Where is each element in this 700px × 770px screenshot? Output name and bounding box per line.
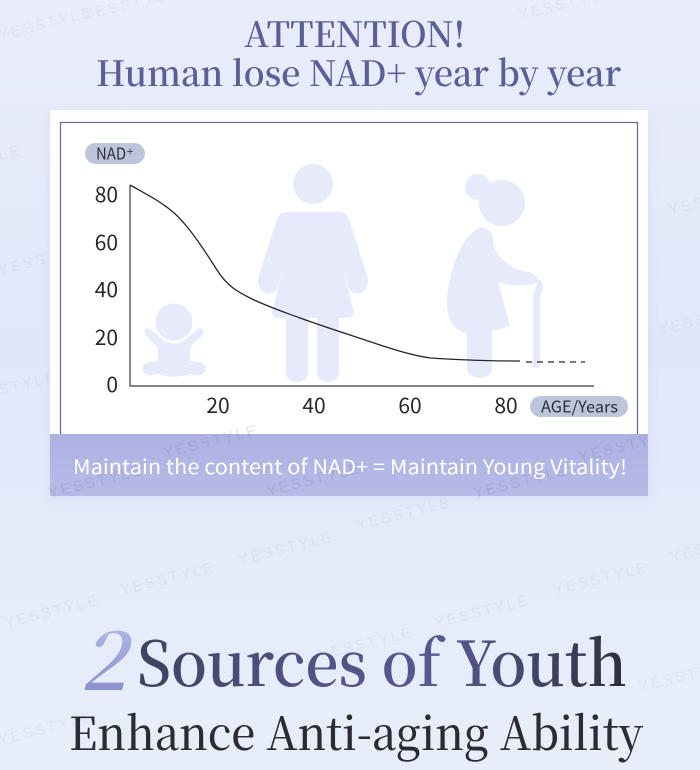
- subheading: Enhance Anti-aging Ability: [69, 698, 643, 764]
- banner: Maintain the content of NAD+ = Maintain Young Vitality!: [73, 451, 627, 480]
- line chart: NAD+ decline by age: [130, 185, 594, 386]
- title: ATTENTION!: [244, 8, 465, 58]
- text: YESSTYLE: [552, 559, 651, 599]
- y axis labels: 80: [95, 179, 118, 209]
- banner: YESSTYLE: [47, 462, 146, 502]
- label: NAD+ pill: [85, 140, 145, 164]
- text: YESSTYLE: [355, 494, 454, 534]
- text: YESSTYLE: [317, 624, 416, 664]
- x axis labels: 80: [494, 390, 518, 420]
- icon: elderly woman with cane: [447, 174, 543, 378]
- icon: baby: [143, 304, 205, 376]
- label: NAD+ pill: NAD⁺: [96, 140, 134, 164]
- banner: [47, 422, 653, 502]
- x axis labels: 60: [398, 390, 422, 420]
- text: YESSTYLE: [119, 559, 218, 599]
- y axis labels: [95, 179, 118, 399]
- text: YESSTYLE: [433, 592, 532, 632]
- text: YESSTYLE: [3, 592, 102, 632]
- y axis labels: 60: [95, 227, 118, 257]
- x axis labels: [206, 390, 518, 420]
- x axis labels: 40: [302, 390, 326, 420]
- heading: 2 Sources of Youth: Sources of Youth: [137, 615, 627, 704]
- label: age pill: AGE/Years: [541, 394, 618, 418]
- y axis labels: 40: [95, 274, 118, 304]
- heading: 2 Sources of Youth: 2: [80, 597, 134, 714]
- banner: YESSTYLE: [162, 422, 261, 462]
- y axis labels: 20: [95, 322, 118, 352]
- banner: YESSTY: [577, 431, 653, 466]
- banner: YESSTYLE: [472, 462, 571, 502]
- banner: YESSTYLE: [265, 460, 364, 500]
- y axis labels: 0: [106, 369, 118, 399]
- text: YESSTYLE: [237, 529, 336, 569]
- icon: adult woman: [258, 164, 368, 382]
- panel: NAD+ chart: [50, 110, 648, 498]
- heading: 2 Sources of Youth: [80, 597, 627, 714]
- title: Human lose NAD+ year by year: [96, 47, 621, 97]
- x axis labels: 20: [206, 390, 230, 420]
- title: [96, 8, 621, 97]
